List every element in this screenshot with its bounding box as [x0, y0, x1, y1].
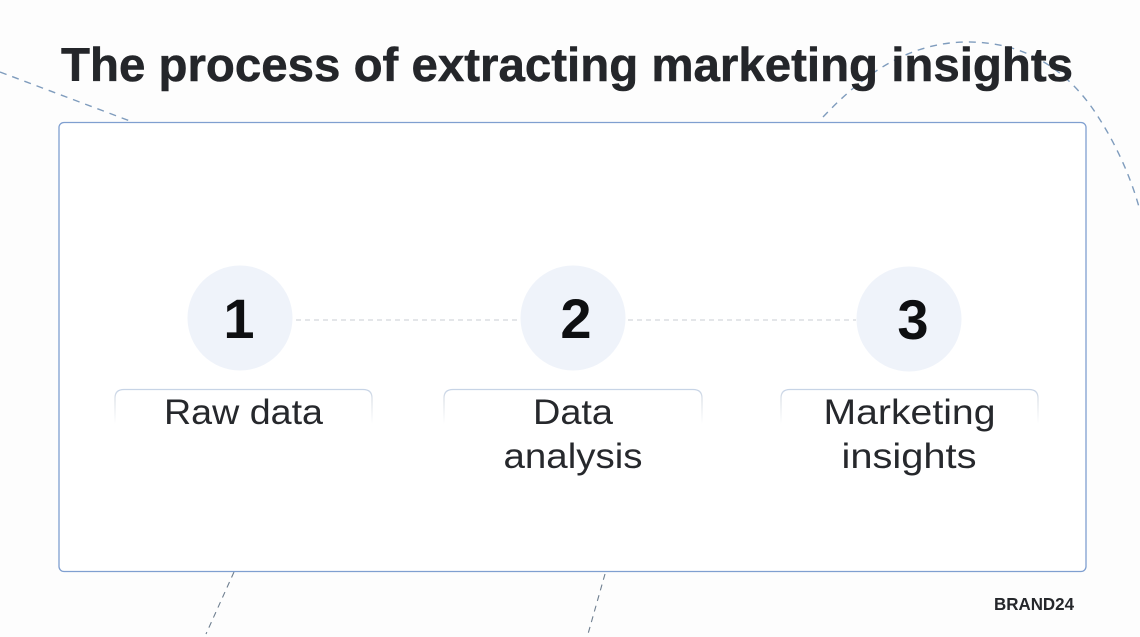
title: The process of extracting marketing insights — [61, 38, 1073, 91]
dashed decorative line: bottom left — [206, 572, 234, 634]
label bracket 1 — [115, 390, 372, 424]
dashed decorative curve: top right arc — [823, 42, 1139, 207]
label: raw data: Raw data — [164, 393, 324, 432]
number badge 3: 3 — [897, 288, 929, 351]
number badge 3 — [856, 266, 962, 372]
label: data analysis: Data — [533, 393, 614, 432]
number badge 2: 2 — [560, 287, 592, 350]
label: marketing insights: Marketing — [824, 393, 996, 432]
dashed decorative line: bottom middle — [588, 574, 605, 634]
connector: step 1 to 2 — [296, 319, 520, 321]
step 3 — [781, 266, 1038, 476]
step 2 — [444, 266, 702, 476]
main panel — [59, 122, 1086, 572]
number badge 2 — [520, 266, 626, 370]
connector: step 2 to 3 — [628, 319, 856, 321]
label: data analysis: analysis — [504, 437, 642, 476]
step 1 — [115, 266, 372, 432]
label bracket 2 — [444, 390, 702, 424]
label: marketing insights: insights — [842, 437, 976, 476]
label bracket 3 — [781, 390, 1038, 424]
number badge 1 — [188, 266, 292, 370]
number badge 1: 1 — [223, 287, 255, 350]
dashed decorative curve: top left — [0, 72, 130, 121]
logo: BRAND24: BRAND24 — [994, 594, 1074, 614]
